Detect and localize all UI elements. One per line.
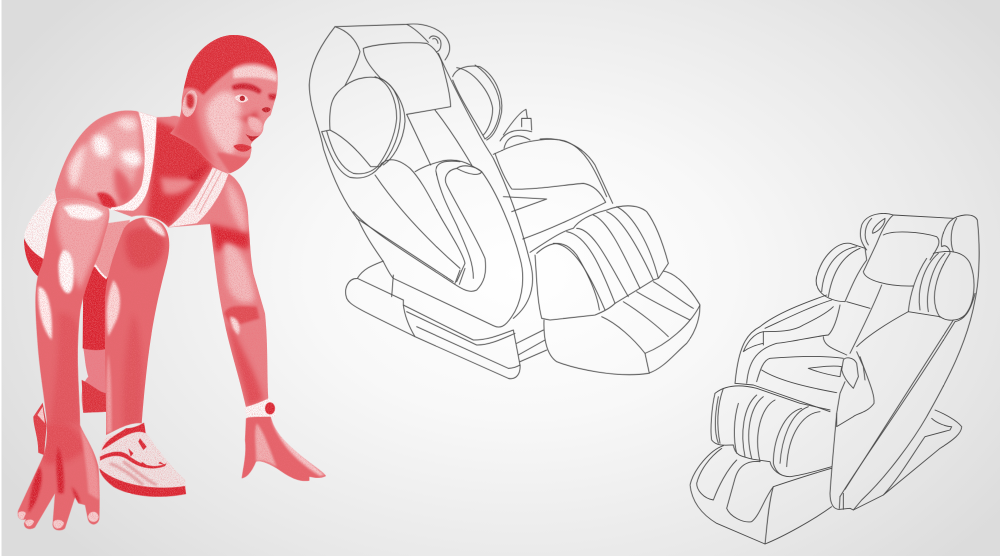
left cushion bbox=[816, 243, 867, 302]
massage chair outline: small bbox=[690, 213, 979, 544]
back panel bbox=[839, 285, 975, 509]
wristwatch bbox=[244, 398, 276, 417]
far armrest bbox=[735, 295, 847, 383]
right cushion bbox=[908, 251, 974, 320]
chair base bbox=[346, 261, 547, 379]
chair base bbox=[853, 410, 962, 510]
leg rest bbox=[530, 206, 668, 320]
left edge highlight bbox=[0, 0, 2, 556]
foot rest bbox=[690, 446, 832, 544]
headrest bbox=[335, 24, 451, 114]
white singlet hem bbox=[24, 190, 57, 259]
head bbox=[170, 32, 280, 173]
runner photo bbox=[18, 32, 326, 530]
shoulder cushion bbox=[322, 77, 405, 178]
running shoe bbox=[98, 423, 186, 497]
red shorts bbox=[24, 238, 120, 350]
seat bbox=[493, 139, 613, 239]
seat bbox=[757, 356, 843, 393]
back shell bbox=[309, 27, 533, 327]
leg rest bbox=[711, 383, 832, 477]
foot rest bbox=[544, 271, 700, 375]
massage chair outline: large bbox=[309, 24, 700, 379]
far cushion bbox=[453, 65, 502, 140]
headrest bbox=[863, 215, 957, 286]
inner thigh bbox=[95, 220, 130, 279]
torso and far arm bbox=[55, 110, 268, 407]
rear leg and shoe bbox=[33, 348, 107, 455]
armrest bbox=[353, 160, 486, 291]
near leg bbox=[105, 217, 169, 435]
white straps bbox=[110, 112, 228, 227]
far hand bbox=[242, 416, 326, 481]
control unit bbox=[837, 352, 874, 427]
outer frame bbox=[830, 213, 979, 510]
remote cradle bbox=[500, 109, 532, 148]
near arm bbox=[18, 198, 110, 530]
